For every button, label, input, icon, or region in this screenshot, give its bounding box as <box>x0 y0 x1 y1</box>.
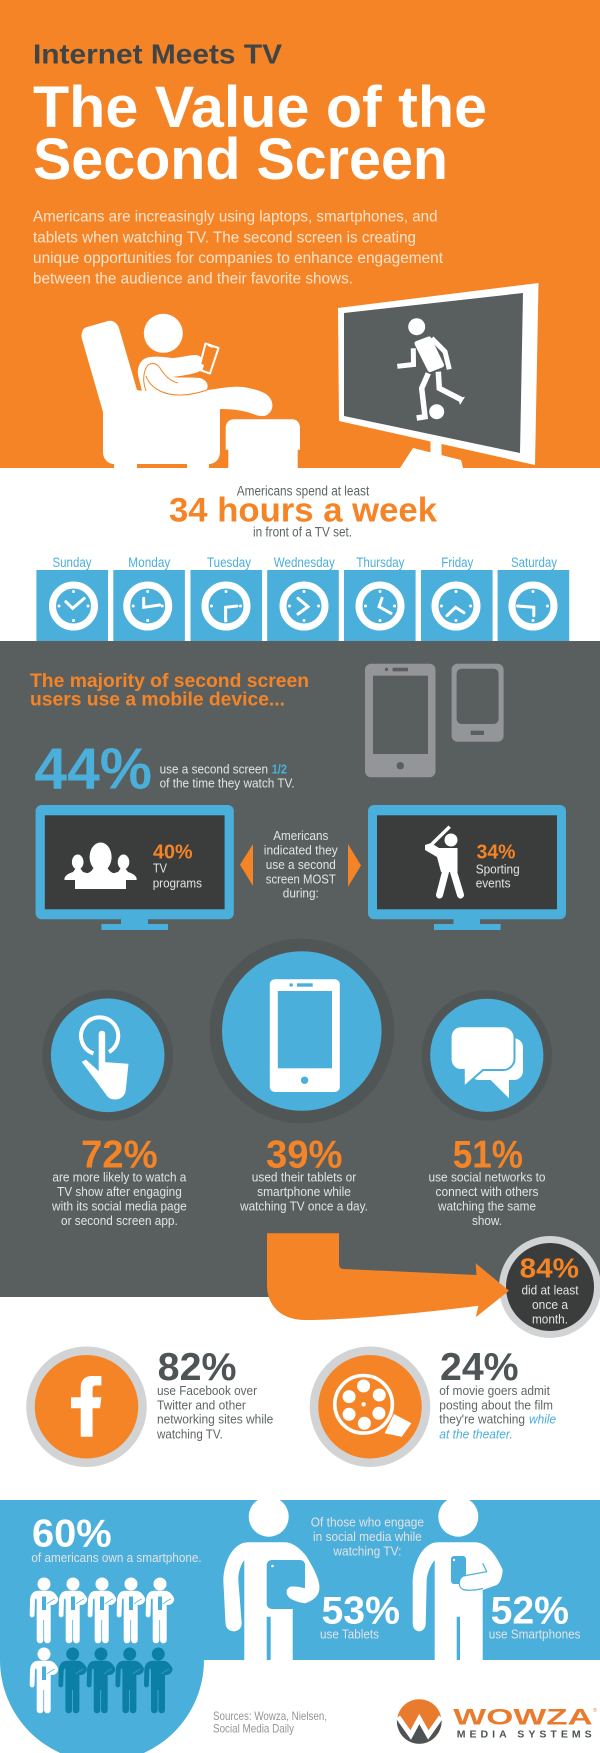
stat: 52 percent use smartphones: 52% <box>491 1589 569 1632</box>
stat: 44 percent: use a second screen <box>160 761 268 776</box>
intro paragraph: between the audience and their favorite shows. <box>33 270 353 287</box>
sources note <box>213 1709 327 1735</box>
text: of those who engage: Of those who engage <box>311 1515 424 1530</box>
icon: gray tablet <box>365 664 436 777</box>
stat: 82 percent: networking sites while <box>157 1412 273 1427</box>
label: TV programs <box>153 861 202 890</box>
day labels: Wednesday <box>274 555 335 570</box>
icon: soccer player <box>397 318 465 419</box>
icon: person in armchair with phone <box>82 314 300 468</box>
callout: 84 percent circle: month. <box>532 1311 568 1326</box>
label: TV programs: programs <box>153 875 202 890</box>
logo: Wowza Media Systems: WOWZA <box>453 1704 593 1729</box>
label: sporting events: Sporting <box>476 861 520 876</box>
stat: 34 percent: 34% <box>476 841 516 863</box>
logo: Wowza Media Systems <box>397 1699 597 1744</box>
stat: 82 percent: Twitter and other <box>157 1397 246 1412</box>
arrow: left <box>240 844 253 886</box>
day labels: Monday <box>128 555 171 570</box>
stat: 60 percent: 60% <box>32 1513 112 1556</box>
text: Americans spend at least: Americans spend at least <box>237 484 369 499</box>
logo: Wowza Media Systems: MEDIA SYSTEMS <box>457 1728 592 1740</box>
callout: 84 percent circle: 84% <box>520 1252 579 1283</box>
callout: 84 percent circle: once a <box>532 1297 569 1312</box>
stat: 51 percent: 51% <box>453 1133 523 1176</box>
callout: 84 percent circle <box>502 1240 598 1334</box>
day labels: Thursday <box>356 555 405 570</box>
icon: facebook circle <box>30 1351 142 1463</box>
headline: 34 hours a week: 34 hours a week <box>169 492 437 530</box>
text: Americans indicated: during: <box>283 886 319 901</box>
stat: 39 percent: 39% <box>266 1133 342 1176</box>
label: TV programs: TV <box>153 861 167 876</box>
stat: 51 percent: show. <box>472 1213 502 1228</box>
heading: majority of second screen users: The majority of second screen <box>30 670 309 692</box>
icon: baseball batter <box>425 827 460 895</box>
text: Americans indicated <box>264 828 338 901</box>
monitor: sporting events 34 percent <box>368 805 566 930</box>
panel: gray mobile device section <box>0 641 600 1297</box>
text: Americans indicated: use a second <box>266 857 336 872</box>
stat: 72 percent <box>51 1133 187 1228</box>
heading: majority of second screen users: users use a mobile device... <box>30 689 285 711</box>
monitor: TV programs 40 percent <box>36 805 234 930</box>
stat: 51 percent <box>428 1133 546 1228</box>
stat: 82 percent: 82% <box>158 1346 236 1389</box>
day labels: Saturday <box>511 555 557 570</box>
icon: group of people <box>64 842 137 889</box>
stat: 72 percent: are more likely to watch a <box>52 1170 187 1185</box>
sources note: Sources: Wowza, Nielsen, <box>213 1709 327 1723</box>
stat: 24 percent: 24% <box>440 1346 519 1389</box>
stat: 82 percent: watching TV. <box>156 1426 223 1441</box>
icon: chat bubbles in circle <box>422 990 552 1120</box>
intro paragraph <box>33 209 444 287</box>
panel: social stats on white <box>30 1346 556 1463</box>
stat: 60 percent <box>31 1513 202 1565</box>
intro paragraph: Americans are increasingly using laptops, smartphones, and <box>33 209 438 226</box>
main title <box>33 75 487 192</box>
clock faces <box>52 585 554 627</box>
day labels: Sunday <box>52 555 92 570</box>
stat: 51 percent: connect with others <box>436 1184 539 1199</box>
arrow: big orange bent arrow <box>267 1233 509 1320</box>
stat: 53 percent use tablets: use Tablets <box>320 1626 379 1641</box>
icon: person holding tablet <box>223 1497 320 1660</box>
icon: person holding smartphone <box>413 1497 503 1660</box>
text: Americans indicated: screen MOST <box>266 871 336 886</box>
day labels: Friday <box>441 555 474 570</box>
icon: film reel circle <box>314 1351 426 1463</box>
day boxes with clocks <box>36 570 569 641</box>
stat: 44 percent <box>34 736 295 801</box>
stat: 60 percent: of americans own a smartphone. <box>31 1550 202 1565</box>
stat: 24 percent: while <box>529 1412 556 1427</box>
arrow: right <box>348 844 361 887</box>
day labels <box>52 555 557 570</box>
intro paragraph: tablets when watching TV. The second screen is creating <box>33 229 416 246</box>
stat: 39 percent: used their tablets or <box>252 1170 357 1185</box>
panel: hours per week <box>36 484 569 641</box>
stat: 40 percent: 40% <box>153 841 193 863</box>
stat: 44 percent: 1/2 <box>272 761 287 776</box>
sources note: Social Media Daily <box>213 1721 294 1735</box>
main title: The Value of the <box>33 75 487 140</box>
stat: 51 percent: use social networks to <box>428 1170 546 1185</box>
icon: gray smartphone <box>452 664 504 742</box>
stat: 82 percent: use Facebook over <box>157 1383 258 1398</box>
panel: orange header <box>0 0 600 468</box>
stat: 39 percent: smartphone while <box>257 1184 351 1199</box>
callout: 84 percent circle: did at least <box>522 1282 579 1297</box>
text: Americans indicated: indicated they <box>264 843 338 858</box>
day labels: Tuesday <box>207 555 251 570</box>
icon: touch hand in circle <box>42 990 173 1121</box>
stat: 39 percent <box>239 1133 368 1213</box>
text: of those who engage: watching TV: <box>332 1543 401 1558</box>
stat: 52 percent use smartphones: use Smartphones <box>489 1626 581 1641</box>
stat: 52 percent use smartphones <box>489 1589 581 1641</box>
stat: 24 percent <box>439 1346 556 1441</box>
stat: 39 percent: watching TV once a day. <box>239 1198 368 1213</box>
stat: 24 percent: at the theater. <box>439 1426 513 1441</box>
stat: 24 percent: they're watching <box>439 1412 525 1427</box>
logo: Wowza Media Systems: ® <box>593 1707 597 1714</box>
chart: pictogram of ten people <box>30 1578 174 1713</box>
kicker heading: Internet Meets TV <box>33 38 282 70</box>
label: sporting events <box>476 861 520 890</box>
stat: 51 percent: watching the same <box>437 1198 536 1213</box>
text: in front of a TV set: in front of a TV set. <box>253 525 352 540</box>
stat: 72 percent: TV show after engaging <box>57 1184 182 1199</box>
main title: Second Screen <box>33 127 448 192</box>
stat: 44 percent: 44% <box>34 736 152 801</box>
heading: majority of second screen users <box>30 670 309 711</box>
stat: 72 percent: or second screen app. <box>61 1213 178 1228</box>
label: sporting events: events <box>476 875 511 890</box>
stat: 72 percent: 72% <box>81 1133 158 1176</box>
stat: 82 percent <box>156 1346 273 1441</box>
stat: 24 percent: of movie goers admit <box>439 1383 550 1398</box>
stat: 44 percent: of the time they watch TV. <box>160 776 295 791</box>
text: of those who engage <box>311 1515 424 1558</box>
panel: blue footer band <box>0 1497 600 1753</box>
stat: 53 percent use tablets: 53% <box>322 1589 400 1632</box>
stat: 72 percent: with its social media page <box>51 1198 187 1213</box>
text: Americans indicated: Americans <box>273 828 329 843</box>
intro paragraph: unique opportunities for companies to enhance engagement <box>33 250 444 267</box>
stat: 24 percent: posting about the film <box>439 1397 553 1412</box>
icon: smartphone in circle <box>209 939 394 1123</box>
icon: television with soccer player <box>338 283 538 468</box>
text: of those who engage: in social media while <box>313 1529 422 1544</box>
